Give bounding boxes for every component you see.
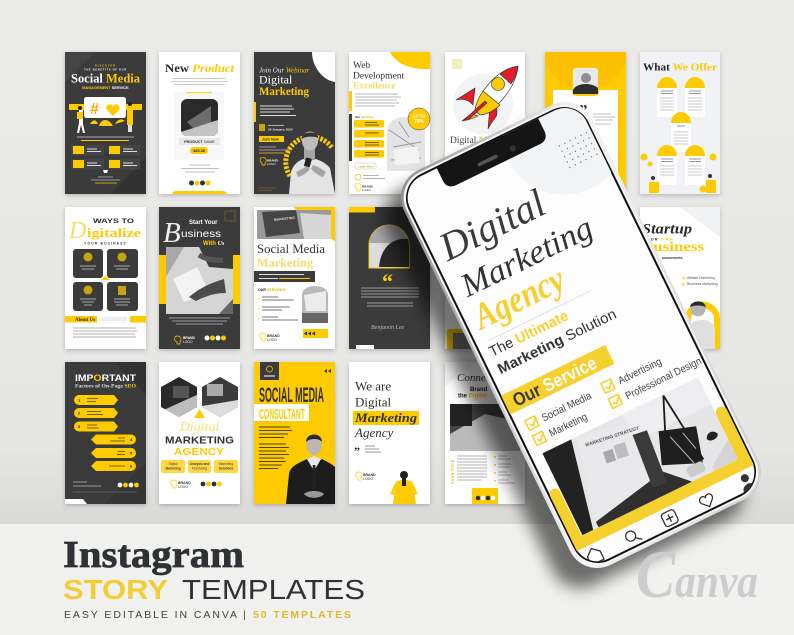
yellow corner frame [293,207,335,242]
brand logo and social [175,336,226,344]
icon: home [586,548,605,562]
product panel [174,92,224,160]
card: social media marketing: OUR SERVICES: [258,288,286,292]
logo tab [260,362,279,380]
tagline: The Ultimate [487,308,571,360]
card heading: Business [642,240,705,255]
laptop arch photo [302,286,328,323]
card heading: amusements: [662,256,683,260]
card heading [165,420,234,458]
headline digital: Digital [431,180,552,270]
brand logo [355,183,374,192]
card heading: Excellence [353,82,396,92]
brand logo and social: BRAND [178,481,191,485]
card heading [457,372,495,400]
discount badge: 70% [414,119,425,125]
right arrow pills: 5 [130,450,133,456]
pill tags [161,460,238,473]
title: instagram: Instagram [63,534,244,576]
join now button: Join Now [262,138,279,142]
screen background circle [502,108,612,194]
about us bar: About Us [75,318,95,323]
icon: rocket [456,66,518,129]
card heading [71,64,141,90]
discount badge: UP TO [413,114,426,118]
card: digital marketing webinar [254,52,335,194]
title: story: STORY [63,574,168,605]
options: Business Marketing [687,282,718,286]
phone mockup [401,102,761,568]
icon: search [625,530,642,542]
side yellow bars [159,255,166,304]
brand logo and social: LOGO [178,485,188,489]
discount badge [408,108,430,130]
icon: hashtag and heart screen: # [90,101,99,118]
list text: YOUR TITLE [451,459,455,484]
photo [450,404,520,451]
card heading [259,66,310,98]
consultant bar [254,404,309,423]
phone body [391,92,771,578]
card: new product [159,52,240,199]
card heading: the Digital [458,394,487,400]
card heading: Digital Marketing [450,136,522,146]
cta outline: Learn More [358,164,375,168]
office photo [542,378,738,535]
card: important factors: Factors of On-Page SEO [75,384,136,390]
office photo: MARKETING STRATEGY [585,425,641,449]
cta outline [355,163,376,169]
brand logo [260,157,279,166]
quote mark: ” [579,101,588,120]
our service banner: Our Service [509,352,600,411]
icon: hashtag and heart screen [69,97,142,133]
join now button [259,136,284,142]
pill tags: Marketing [219,462,233,466]
man with phone photo [286,132,335,194]
hexagon photos [161,377,238,418]
footer band [0,524,794,635]
options: Affiliate Marketing [687,276,715,280]
card heading: AGENCY [174,446,224,458]
checklist: Professional Design [624,355,704,402]
card heading: Connect [457,372,495,384]
left arrow pills: 3 [78,424,81,429]
marketing highlight: Marketing [354,410,418,425]
checklist: Advertising [616,356,664,387]
bottom pill [172,191,227,194]
pill tags: Digital [169,462,178,466]
dot grid [558,132,598,168]
pill tags: Marketing [165,466,181,470]
card heading [163,211,235,249]
card heading: MANAGEMENT SERVICE [82,85,129,90]
title block [63,534,365,621]
options [682,276,718,286]
brand logo: BRAND [267,334,280,338]
pill tags: Monitoring [192,466,207,470]
tagline: Marketing Solution [495,306,619,378]
card: startup business [640,207,720,349]
social icons [118,483,139,487]
card heading: usiness [181,228,221,240]
intro text [77,136,134,138]
pill tags: Analysis and [190,462,209,466]
card: social media consultant: CONSULTANT [259,406,305,423]
card heading: What We Offer [643,62,717,74]
dark tagline [254,271,315,282]
card: digital marketing agency [159,362,241,504]
card heading: THE BENEFITS OF OUR [84,68,127,72]
card: social media consultant [254,362,335,504]
card heading: MARKETING [165,436,234,446]
card heading: Digital [259,72,293,86]
card: important factors [65,362,146,504]
quote mark: “ [382,269,393,294]
offer tiles [657,77,705,185]
white panel [553,90,618,194]
feature tiles [71,145,140,170]
product panel: PRODUCT NAME [184,140,215,144]
table [596,472,692,528]
laptop photo: MARKETING [274,216,295,222]
card heading [642,222,705,260]
card heading: Marketing [259,84,309,98]
icon: profile [740,474,752,492]
headline agency: Agency [466,259,572,339]
card heading: Social Media [257,241,325,256]
brand logo: LOGO [267,162,276,166]
card heading: YOUR BUSINESS [84,242,127,246]
card: digital marketing webinar: 26 January, 2024 [268,128,293,132]
card heading: New Product [165,61,235,75]
card: social media marketing [254,207,335,349]
left arrow pills: 2 [78,410,81,416]
card heading: B [163,217,181,249]
card heading: D [68,218,86,244]
card heading: IMP ORTANT [75,373,137,383]
services list [262,297,298,320]
contact block [91,170,120,183]
social icons [189,180,210,186]
checklist [524,358,702,446]
icon: add [660,509,679,527]
photo: desk sketch [387,117,425,171]
product panel: $25.35 [193,149,205,153]
phone shadow [374,112,754,598]
card: social media marketing: Marketing [257,255,313,270]
headline marketing: Marketing [454,210,599,305]
four dark tiles [73,249,138,311]
brand logo: LOGO [362,188,371,192]
divider [488,290,591,341]
woman illustration [392,471,416,504]
brand logo and social: BRAND [183,336,196,340]
right arrow pills [91,434,136,471]
brand logo: LOGO [267,338,277,342]
curtain [632,430,666,488]
man and arch [685,301,720,349]
subtitle count: 50 TEMPLATES [253,609,351,621]
signature: Benjamin Lee [371,325,404,331]
card heading: Digital [179,420,219,435]
checklist: Marketing [547,411,589,440]
brand logo [356,472,376,481]
card: we are digital marketing: Agency [354,425,393,440]
service buttons [354,120,384,158]
man in suit [286,434,335,504]
card: testimonial dark [349,207,430,349]
card: start your business [159,207,240,349]
brand logo: BRAND [362,184,374,188]
laptop photo [257,210,331,239]
card heading: Start Your [189,220,218,226]
card: testimonial yellow [545,52,626,194]
left arrow pills: 1 [78,398,81,402]
brand logo: BRAND [363,473,376,477]
icon: heart [698,493,714,508]
pill tags: Solutions [219,466,233,470]
card heading: Web [353,61,370,71]
card heading: We are [355,378,391,394]
yellow corner [390,52,430,69]
card heading: igitalize [87,225,141,240]
card heading: With Us [203,241,225,247]
canva wordmark: Canva [636,536,758,612]
subtitle divider: | [243,609,246,621]
card heading: DISCOVER [95,64,116,68]
brand logo: LOGO [363,477,373,481]
card heading: Digital [355,394,391,410]
text: SOCIAL MEDIA [259,384,324,407]
yellow photo frame [547,405,754,551]
left arrow pills [74,395,118,432]
card: we are digital marketing: ” [354,444,360,458]
desk photo [166,247,233,314]
brand logo [260,333,280,342]
corner cutout [312,52,335,82]
portrait [572,67,599,96]
checklist: Social Media [540,390,594,424]
tripod [658,395,704,466]
brand logo and social: LOGO [183,340,193,344]
right arrow pills: 4 [130,437,133,442]
card: web development [349,52,430,194]
notch [436,117,549,189]
right arrow pills: 6 [130,464,133,468]
arch portrait [369,223,409,268]
card: what we offer [640,52,720,194]
card: web development: Our Services [355,115,374,119]
card heading: Startup [642,222,693,238]
card: hidden middle [445,207,525,349]
yellow arrow tab [303,329,328,338]
card: we are digital marketing [349,362,430,504]
card: connect brand [445,362,525,504]
brand logo: BRAND [267,158,279,162]
list text [451,456,515,484]
card heading: YOUR OWN [643,236,673,242]
card: rocket [445,52,525,194]
about us bar [65,316,146,323]
card heading: Social Media [71,72,141,86]
brand logo and social [171,480,222,489]
nav bar [586,474,752,562]
subtitle: EASY EDITABLE IN CANVA [64,609,237,621]
card heading [68,218,141,246]
card heading: Join Our Webinar [259,66,310,74]
card: social media management [65,52,146,194]
card heading: Development [353,72,405,82]
card heading: Brand [470,387,488,393]
yellow social box [472,488,498,504]
card heading: WAYS TO [93,218,134,225]
decorative people and gears [640,154,716,193]
card: ways to digitalize [65,207,146,349]
title: templates: TEMPLATES [182,574,365,605]
